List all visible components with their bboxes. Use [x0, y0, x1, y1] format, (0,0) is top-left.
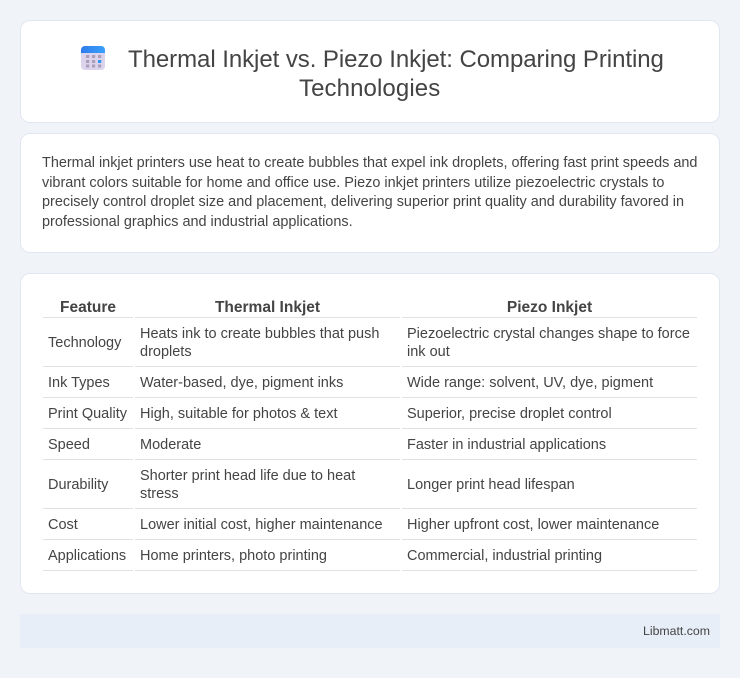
comparison table: Print Quality [48, 406, 127, 422]
comparison table: Commercial, industrial printing [407, 548, 602, 564]
comparison table: Wide range: solvent, UV, dye, pigment [407, 375, 653, 391]
header panel [20, 20, 720, 123]
comparison table: Faster in industrial applications [407, 437, 606, 453]
comparison table: Technology [48, 335, 121, 351]
footer bar [20, 614, 720, 648]
comparison table: ink out [407, 344, 450, 360]
comparison table: Home printers, photo printing [140, 548, 327, 564]
title: Technologies [299, 75, 440, 102]
comparison table: Moderate [140, 437, 201, 453]
intro text [42, 155, 697, 230]
footer text: Libmatt.com [643, 624, 710, 638]
comparison table: Heats ink to create bubbles that push [140, 326, 379, 342]
comparison table: Longer print head lifespan [407, 477, 575, 493]
icon: calendar [81, 46, 105, 70]
comparison table: stress [140, 486, 179, 502]
comparison panel [20, 273, 720, 594]
intro panel [20, 133, 720, 253]
comparison table: High, suitable for photos & text [140, 406, 337, 422]
comparison table: droplets [140, 344, 192, 360]
comparison table: Piezoelectric crystal changes shape to force [407, 326, 690, 342]
comparison table: Cost [48, 517, 78, 533]
title: Thermal Inkjet vs. Piezo Inkjet: Comparing Printing [128, 46, 664, 73]
intro text: professional graphics and industrial applications. [42, 214, 353, 230]
comparison table: Shorter print head life due to heat [140, 468, 355, 484]
comparison table: Lower initial cost, higher maintenance [140, 517, 383, 533]
intro text: vibrant colors suitable for home and office use. Piezo inkjet printers utilize piezoelectric crystals to [42, 175, 664, 191]
comparison table: Feature [60, 298, 116, 316]
comparison table: Applications [48, 548, 126, 564]
intro text: precisely control droplet size and placement, delivering superior print quality and durability favored in [42, 194, 684, 210]
comparison table: Durability [48, 477, 108, 493]
comparison table: Higher upfront cost, lower maintenance [407, 517, 659, 533]
comparison table: Thermal Inkjet [215, 298, 320, 316]
title [128, 46, 664, 102]
comparison table: Superior, precise droplet control [407, 406, 612, 422]
comparison table [43, 298, 697, 571]
comparison table: Water-based, dye, pigment inks [140, 375, 343, 391]
comparison table: Speed [48, 437, 90, 453]
comparison table: Piezo Inkjet [507, 298, 592, 316]
comparison table: Ink Types [48, 375, 110, 391]
intro text: Thermal inkjet printers use heat to create bubbles that expel ink droplets, offering fast print speeds and [42, 155, 697, 171]
